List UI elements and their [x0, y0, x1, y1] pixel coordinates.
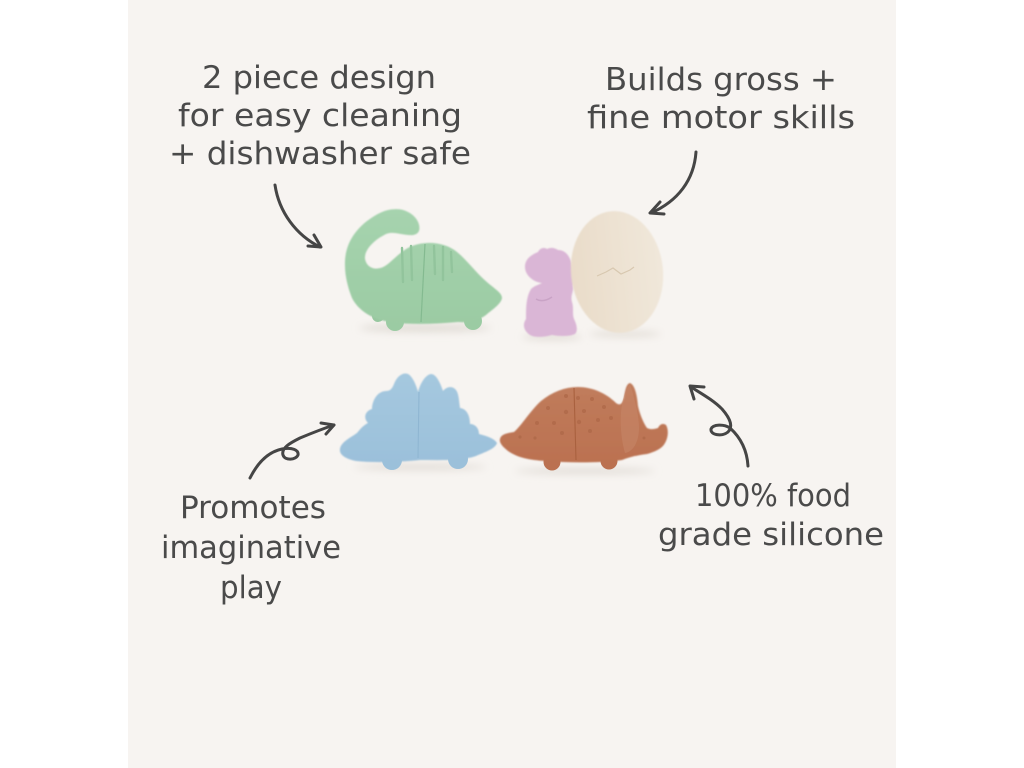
callout: gross and fine motor skills: fine motor skills: [587, 100, 855, 136]
callout: imaginative play: Promotes: [180, 490, 326, 526]
arrow: to blue dinosaur: [250, 423, 334, 478]
callout: food grade silicone: [658, 478, 884, 553]
callout: imaginative play: play: [220, 570, 282, 606]
icon: cream egg: [565, 207, 669, 337]
callout: 2 piece design: 2 piece design: [202, 60, 436, 96]
callout: gross and fine motor skills: [587, 62, 855, 136]
icon: green dinosaur: [345, 209, 502, 332]
callout: 2 piece design: + dishwasher safe: [169, 136, 471, 172]
callout: imaginative play: imaginative: [161, 530, 341, 566]
callout: food grade silicone: 100% food: [695, 478, 851, 514]
arrow: to terracotta dinosaur: [690, 386, 748, 466]
arrow: to egg: [650, 152, 696, 214]
callout: gross and fine motor skills: Builds gross +: [605, 62, 837, 98]
icon: blue stegosaurus: [340, 373, 497, 470]
icon: pink baby dinosaur: [522, 248, 582, 340]
callout: food grade silicone: grade silicone: [658, 517, 884, 553]
callout: imaginative play: [161, 490, 341, 606]
background panel: [128, 0, 896, 768]
callout: 2 piece design: [169, 60, 471, 172]
callout: 2 piece design: for easy cleaning: [178, 98, 462, 134]
icon: terracotta triceratops: [500, 383, 668, 474]
arrow: to green dinosaur: [275, 185, 321, 247]
